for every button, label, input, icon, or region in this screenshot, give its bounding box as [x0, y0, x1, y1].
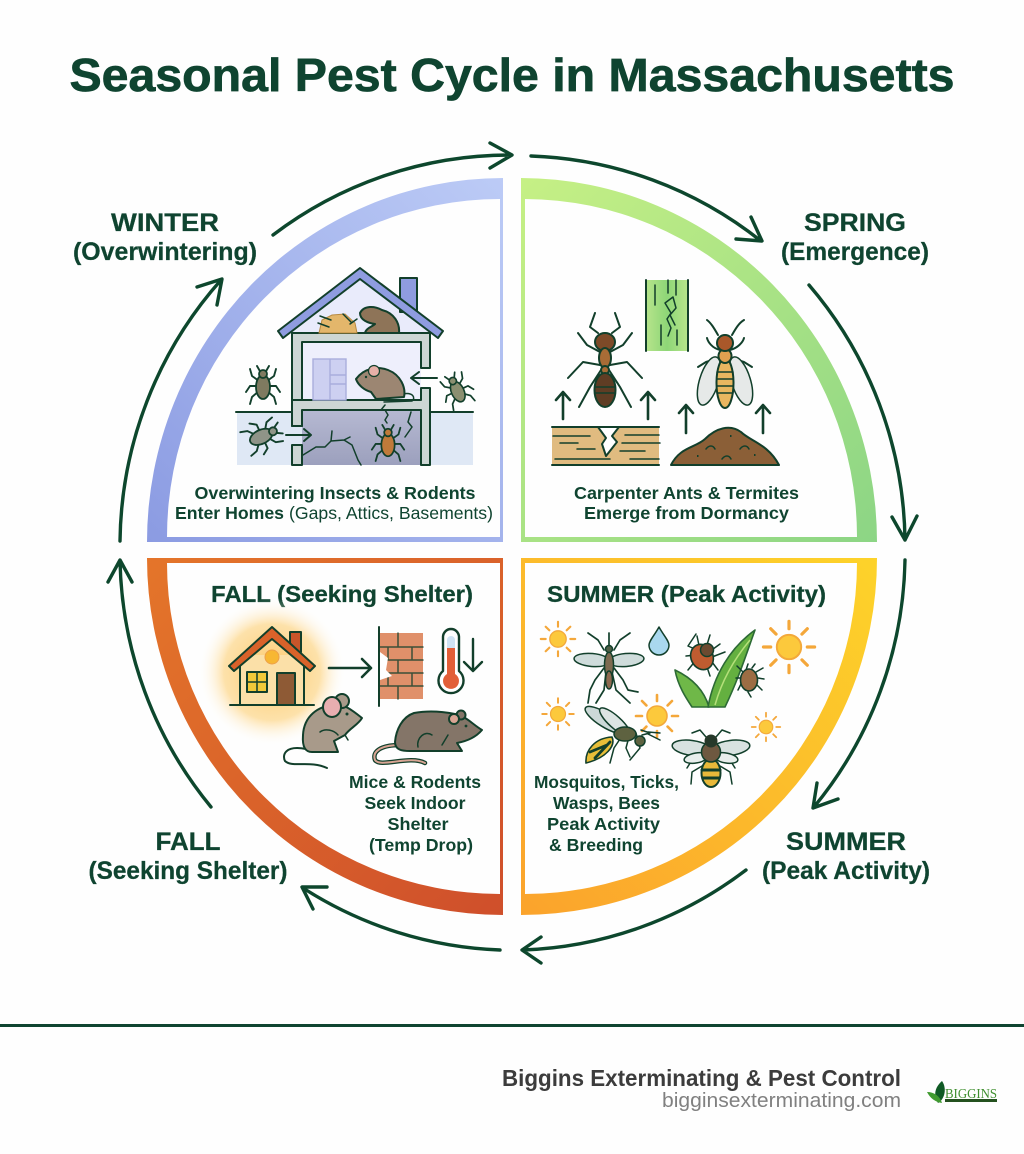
fall heading: FALL (Seeking Shelter): [211, 581, 473, 607]
icon: warm house: [198, 598, 346, 746]
fall quadrant frame: [147, 558, 503, 915]
icon: green cracked wood: [645, 280, 689, 351]
season label: spring: SPRING: [804, 209, 906, 237]
icon: house cross-section with pests: [236, 268, 478, 465]
footer divider: [0, 1024, 1024, 1027]
icon: wasp: [582, 702, 660, 763]
summer text: Peak Activity: [547, 814, 660, 834]
panel: spring: [521, 178, 877, 542]
panel: summer: [521, 558, 877, 915]
icon: attic rodent: [360, 307, 399, 333]
arrows: up from wood: [556, 392, 655, 419]
icon: bee: [671, 730, 751, 787]
icon: cracked wood plank: [552, 427, 660, 465]
icon: carpenter ant: [568, 313, 642, 407]
season label: winter: WINTER: [111, 209, 219, 237]
icon: thermometer with down arrow: [438, 629, 482, 693]
winter text: (Gaps, Attics, Basements): [289, 503, 493, 523]
panel: winter: [147, 178, 503, 542]
season label: summer: (Peak Activity): [762, 857, 930, 885]
title: Seasonal Pest Cycle in Massachusetts: [70, 49, 955, 101]
icon: water drop: [649, 627, 669, 655]
icon: nest: [318, 314, 357, 333]
icon: beetle lower left: [239, 413, 287, 459]
season label: fall: [88, 828, 288, 885]
icon: sun 3: [542, 698, 574, 730]
icon: sun 4: [636, 695, 678, 737]
arrow: into basement: [286, 429, 311, 441]
fall text: Mice & Rodents: [349, 772, 481, 792]
season label: winter: (Overwintering): [73, 238, 257, 266]
summer text: & Breeding: [549, 835, 643, 855]
icon: cracked brick wall: [379, 627, 423, 706]
season label: winter: [73, 209, 257, 266]
arrow: right side to summer label: [813, 560, 905, 808]
fall text: (Temp Drop): [369, 835, 473, 855]
cycle arrows ring: [108, 143, 917, 963]
icon: beetle upper left: [246, 366, 280, 404]
winter text: Enter Homes: [175, 503, 284, 523]
season label: fall: (Seeking Shelter): [88, 857, 288, 885]
spring text: Carpenter Ants & Termites: [574, 483, 799, 503]
icon: small tick: [736, 664, 764, 697]
icon: sun 5: [752, 713, 780, 741]
icon: mosquito: [574, 633, 644, 703]
arrow: spring to summer: [809, 285, 917, 540]
spring text: [574, 483, 799, 523]
icon: Biggins logo: [927, 1081, 997, 1103]
arrow: left side to winter label: [120, 279, 222, 541]
arrow: summer to fall: [522, 870, 746, 963]
fall text: Shelter: [388, 814, 449, 834]
season label: summer: SUMMER: [786, 828, 906, 856]
summer heading: SUMMER (Peak Activity): [547, 581, 826, 607]
fall text: [349, 772, 481, 855]
arrow: fall to winter: [108, 560, 211, 807]
season label: spring: (Emergence): [781, 238, 929, 266]
summer quadrant frame: [521, 558, 877, 915]
icon: soil mound: [671, 428, 779, 465]
icon: Biggins logo: BIGGINS: [945, 1087, 997, 1102]
footer brand text: [502, 1065, 901, 1112]
door: [313, 359, 346, 400]
arrow: winter to spring: [273, 143, 512, 235]
arrow: spring to its label: [531, 156, 762, 241]
icon: beetle in basement: [372, 425, 404, 461]
icon: large tick: [686, 634, 725, 676]
panel: fall: [147, 558, 503, 915]
season label: summer: [762, 828, 930, 885]
arrow: house to wall: [329, 659, 371, 677]
foundation cracks: [303, 405, 412, 465]
winter text: Overwintering Insects & Rodents: [194, 483, 476, 503]
arrow: bottom to fall label: [302, 887, 500, 950]
fall text: Seek Indoor: [364, 793, 466, 813]
icon: rat: [374, 710, 482, 763]
icon: beetle right: [436, 368, 478, 412]
spring quadrant frame: [521, 178, 877, 542]
icon: sun 1: [541, 622, 575, 656]
summer text: Wasps, Bees: [553, 793, 660, 813]
summer text: [534, 772, 679, 855]
footer brand text: bigginsexterminating.com: [662, 1090, 901, 1112]
spring text: Emerge from Dormancy: [584, 503, 789, 523]
season label: fall: FALL: [156, 828, 220, 856]
icon: termite: [693, 320, 757, 408]
icon: sun 2: [763, 621, 815, 673]
arrows: up from soil: [679, 405, 770, 433]
footer brand text: Biggins Exterminating & Pest Control: [502, 1065, 901, 1091]
winter quadrant frame: [147, 178, 503, 542]
season label: spring: [781, 209, 929, 266]
winter text: [175, 483, 493, 523]
icon: mouse: [284, 694, 362, 768]
icon: grass blades: [675, 630, 755, 707]
summer text: Mosquitos, Ticks,: [534, 772, 679, 792]
arrow: into room: [411, 372, 437, 384]
icon: mouse in room: [356, 366, 414, 402]
